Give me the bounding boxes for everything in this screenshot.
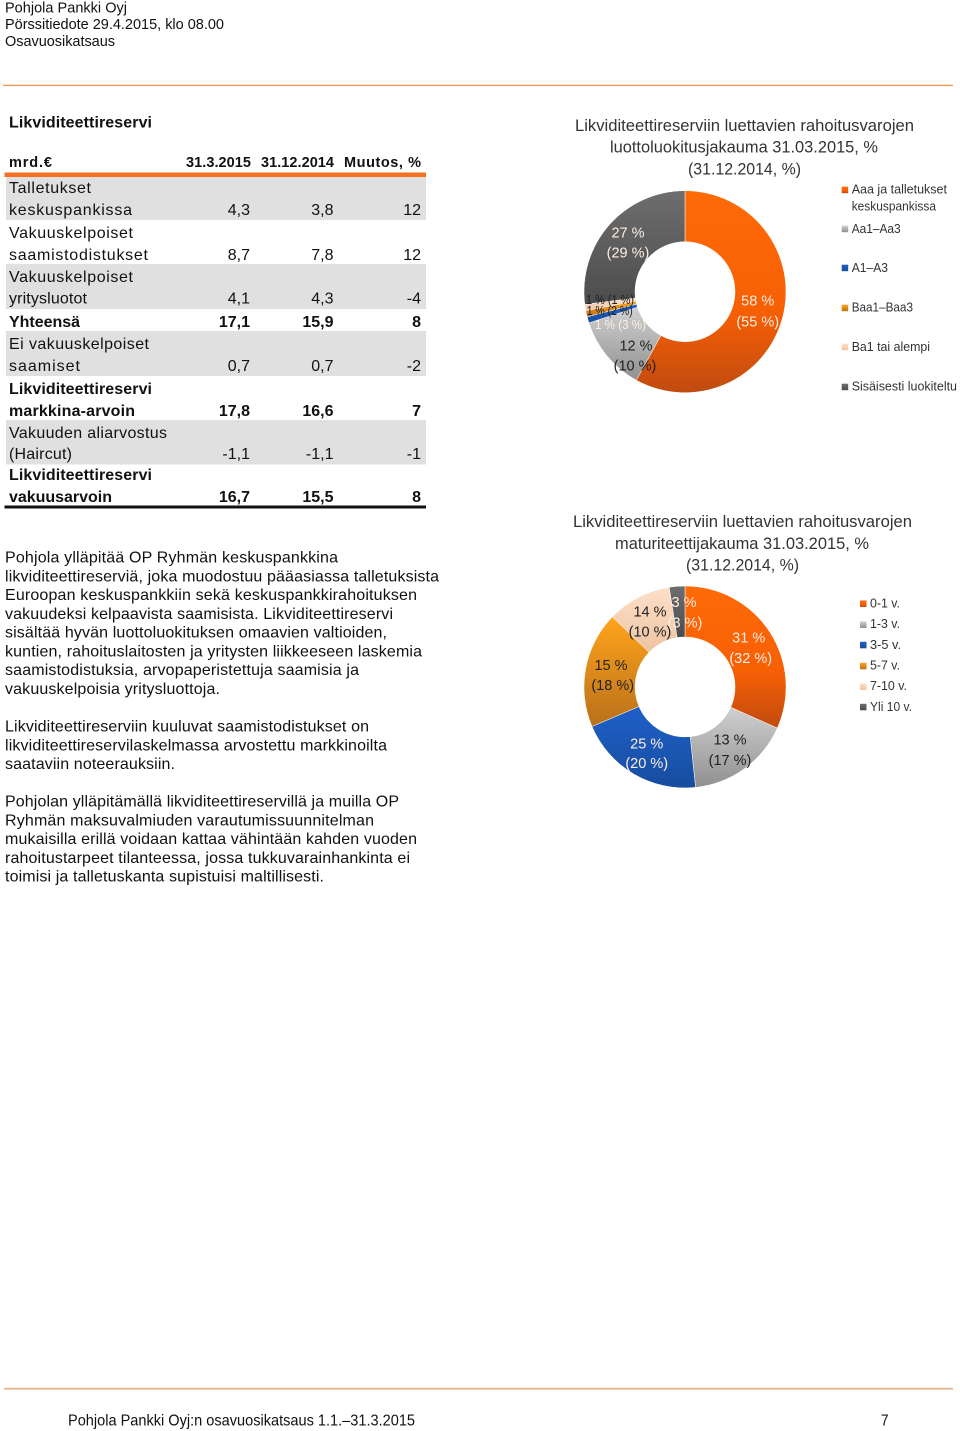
row: likviditeettireservi markkina-arvoin: 16,6 <box>302 403 334 420</box>
text block: paragraph 1: kuntien, rahoituslaitosten ja yritysten liikkeeseen laskemia <box>5 644 422 660</box>
text block: paragraph 1: likviditeettireserviä, joka muodostuu pääasiassa talletuksista <box>5 568 439 586</box>
text block: paragraph 1 <box>5 550 439 698</box>
row: vakuuskelpoiset yritysluotot: Vakuuskelpoiset <box>9 269 134 286</box>
row: likviditeettireservi markkina-arvoin: 7 <box>412 403 421 420</box>
table column headers: 31.12.2014 <box>261 155 334 171</box>
row: vakuuskelpoiset saamistodistukset: Vakuuskelpoiset <box>9 225 134 242</box>
donut data labels: (32 %) <box>729 651 772 667</box>
donut chart: maturity <box>584 586 786 788</box>
chart title <box>573 513 912 574</box>
donut chart: credit rating <box>584 191 786 393</box>
row: likviditeettireservi markkina-arvoin: markkina-arvoin <box>9 403 135 420</box>
legend: Yli 10 v. <box>870 700 912 714</box>
legend: A1–A3 <box>852 261 888 275</box>
row: vakuuskelpoiset saamistodistukset: 7,8 <box>311 247 334 264</box>
text block: paragraph 1: Pohjola ylläpitää OP Ryhmän keskuspankkina <box>5 550 338 567</box>
row: yhteensä: Yhteensä <box>9 314 80 331</box>
donut data labels: 58 % <box>741 294 774 310</box>
text block: paragraph 3: rahoitustarpeet tilanteessa, jossa tukkuvarainhankinta ei <box>5 850 410 867</box>
chart title: (31.12.2014, %) <box>688 160 801 178</box>
row: talletukset keskuspankissa: keskuspankissa <box>9 202 132 219</box>
row: yhteensä: 17,1 <box>219 314 250 331</box>
text block: paragraph 2: Likviditeettireserviin kuuluvat saamistodistukset on <box>5 719 369 736</box>
table: likviditeettireservi <box>4 114 426 508</box>
donut data labels: (55 %) <box>736 315 779 331</box>
chart title: Likviditeettireserviin luettavien rahoitusvarojen <box>573 513 912 531</box>
text block: paragraph 1: vakuuskelpoisia yritysluottoja. <box>5 681 220 698</box>
chart title: maturiteettijakauma 31.03.2015, % <box>615 535 869 553</box>
donut data labels: (10 %) <box>629 625 671 641</box>
row: likviditeettireservi vakuusarvoin: Likviditeettireservi <box>9 467 152 484</box>
row: vakuuden aliarvostus <box>9 425 421 463</box>
donut data labels: 1 % (3 %) <box>595 317 646 332</box>
page footer: Pohjola Pankki Oyj:n osavuosikatsaus 1.1.–31.3.2015 <box>68 1412 415 1430</box>
legend: Baa1–Baa3 <box>852 301 913 315</box>
donut data labels: 13 % <box>713 732 747 748</box>
donut data labels: (18 %) <box>591 678 634 694</box>
donut data labels: 31 % <box>732 631 765 647</box>
table heading: Likviditeettireservi <box>9 114 152 132</box>
page footer: 7 <box>881 1412 889 1430</box>
row: talletukset keskuspankissa: 3,8 <box>311 202 334 219</box>
legend: keskuspankissa <box>852 200 936 214</box>
row: ei vakuuskelpoiset saamiset: -2 <box>407 358 421 375</box>
text block: paragraph 3: toimisi ja talletuskanta supistuisi maltillisesti. <box>5 869 324 886</box>
page header: Pörssitiedote 29.4.2015, klo 08.00 <box>5 17 224 33</box>
text block: paragraph 1: saamistodistuksia, arvopaperistettuja saamisia ja <box>5 662 359 679</box>
donut data labels: 25 % <box>630 736 663 752</box>
table column headers: mrd.€ <box>9 155 52 171</box>
row: likviditeettireservi vakuusarvoin <box>9 467 421 506</box>
row: likviditeettireservi markkina-arvoin: 17,8 <box>219 403 250 420</box>
donut data labels: 1 % (2 %) <box>587 303 633 318</box>
text block: paragraph 2 <box>5 719 387 773</box>
table row shading <box>4 172 426 508</box>
row: vakuuden aliarvostus: -1 <box>407 446 421 463</box>
legend: Sisäisesti luokiteltu <box>852 380 957 394</box>
legend: 5-7 v. <box>870 658 900 672</box>
row: vakuuskelpoiset yritysluotot: 4,1 <box>228 290 250 308</box>
row: ei vakuuskelpoiset saamiset: 0,7 <box>228 358 250 375</box>
donut data labels: 3 % <box>672 595 697 611</box>
page header: Pohjola Pankki Oyj <box>5 0 127 16</box>
row: talletukset keskuspankissa <box>9 180 421 219</box>
chart title: (31.12.2014, %) <box>686 556 799 574</box>
donut data labels: 12 % <box>619 339 653 355</box>
text block: paragraph 3 <box>5 794 417 886</box>
text block: paragraph 1: Euroopan keskuspankkiin sekä keskuspankkirahoituksen <box>5 587 417 604</box>
donut data labels <box>591 595 772 772</box>
donut data labels <box>586 226 779 375</box>
row: yhteensä <box>9 314 421 331</box>
text block: paragraph 2: likviditeettireservilaskelmassa arvostettu markkinoilta <box>5 737 387 754</box>
row: ei vakuuskelpoiset saamiset: saamiset <box>9 358 81 375</box>
row: vakuuden aliarvostus: Vakuuden aliarvostus <box>9 425 167 442</box>
table column headers: 31.3.2015 <box>186 155 251 171</box>
text block: paragraph 1: vakuudeksi kelpaavista saamisista. Likviditeettireservi <box>5 606 393 623</box>
row: vakuuskelpoiset yritysluotot: yritysluotot <box>9 290 88 308</box>
text block: paragraph 3: mukaisilla erillä voidaan kattaa vähintään kahden vuoden <box>5 831 417 848</box>
row: talletukset keskuspankissa: Talletukset <box>9 180 92 197</box>
row: likviditeettireservi markkina-arvoin: Likviditeettireservi <box>9 381 152 398</box>
row: vakuuskelpoiset saamistodistukset: 8,7 <box>228 247 250 264</box>
row: vakuuskelpoiset saamistodistukset: 12 <box>403 247 421 264</box>
text block: paragraph 3: Pohjolan ylläpitämällä likviditeettireservillä ja muilla OP <box>5 794 399 811</box>
donut data labels: 1 % (1 %) <box>586 292 634 307</box>
donut data labels: 14 % <box>633 605 667 621</box>
row: likviditeettireservi vakuusarvoin: 16,7 <box>219 489 250 506</box>
row: talletukset keskuspankissa: 12 <box>403 202 421 219</box>
legend: 7-10 v. <box>870 679 907 693</box>
chart panel: maturiteettijakauma <box>573 513 912 788</box>
row: vakuuskelpoiset yritysluotot: -4 <box>407 290 421 308</box>
row: vakuuskelpoiset yritysluotot <box>9 269 421 308</box>
chart title <box>575 117 914 178</box>
page header: Osavuosikatsaus <box>5 34 115 50</box>
donut data labels: (29 %) <box>607 246 649 262</box>
row: ei vakuuskelpoiset saamiset: 0,7 <box>311 358 334 375</box>
legend: 3-5 v. <box>870 638 901 652</box>
page header <box>3 0 953 86</box>
row: talletukset keskuspankissa: 4,3 <box>228 202 250 219</box>
legend: Aaa ja talletukset <box>852 182 947 196</box>
chart title: luottoluokitusjakauma 31.03.2015, % <box>610 138 878 156</box>
row: vakuuskelpoiset saamistodistukset <box>9 225 421 264</box>
page footer <box>4 1388 953 1430</box>
row: yhteensä: 8 <box>412 314 421 331</box>
donut data labels: (3 %) <box>668 616 702 632</box>
donut data labels: 27 % <box>611 226 645 242</box>
row: yhteensä: 15,9 <box>302 314 334 331</box>
legend: 1-3 v. <box>870 617 900 631</box>
donut data labels: (17 %) <box>709 753 751 769</box>
row: vakuuskelpoiset yritysluotot: 4,3 <box>311 290 334 308</box>
chart panel: luottoluokitusjakauma <box>575 117 957 394</box>
legend <box>842 182 957 394</box>
legend: 0-1 v. <box>870 596 900 610</box>
donut data labels: (10 %) <box>614 359 656 375</box>
row: ei vakuuskelpoiset saamiset <box>9 336 421 375</box>
legend: Ba1 tai alempi <box>852 340 930 354</box>
table column headers <box>9 155 421 171</box>
legend <box>860 596 912 714</box>
table column headers: Muutos, % <box>344 155 421 171</box>
row: vakuuden aliarvostus: -1,1 <box>306 446 334 463</box>
chart title: Likviditeettireserviin luettavien rahoitusvarojen <box>575 117 914 135</box>
donut data labels: (20 %) <box>625 756 668 772</box>
row: likviditeettireservi vakuusarvoin: 15,5 <box>302 489 334 506</box>
row: ei vakuuskelpoiset saamiset: Ei vakuuskelpoiset <box>9 336 150 353</box>
donut data labels: 15 % <box>594 658 628 674</box>
row: vakuuden aliarvostus: (Haircut) <box>9 446 72 463</box>
row: vakuuden aliarvostus: -1,1 <box>222 446 250 463</box>
row: likviditeettireservi vakuusarvoin: 8 <box>412 489 421 506</box>
text block: paragraph 2: saataviin noteerauksiin. <box>5 756 175 773</box>
text block: paragraph 3: Ryhmän maksuvalmiuden varautumissuunnitelman <box>5 812 374 830</box>
row: likviditeettireservi markkina-arvoin <box>9 381 421 420</box>
legend: Aa1–Aa3 <box>852 222 901 236</box>
row: likviditeettireservi vakuusarvoin: vakuusarvoin <box>9 489 112 506</box>
row: vakuuskelpoiset saamistodistukset: saamistodistukset <box>9 247 149 264</box>
text block: paragraph 1: sisältää hyvän luottoluokituksen omaavien valtioiden, <box>5 625 387 642</box>
